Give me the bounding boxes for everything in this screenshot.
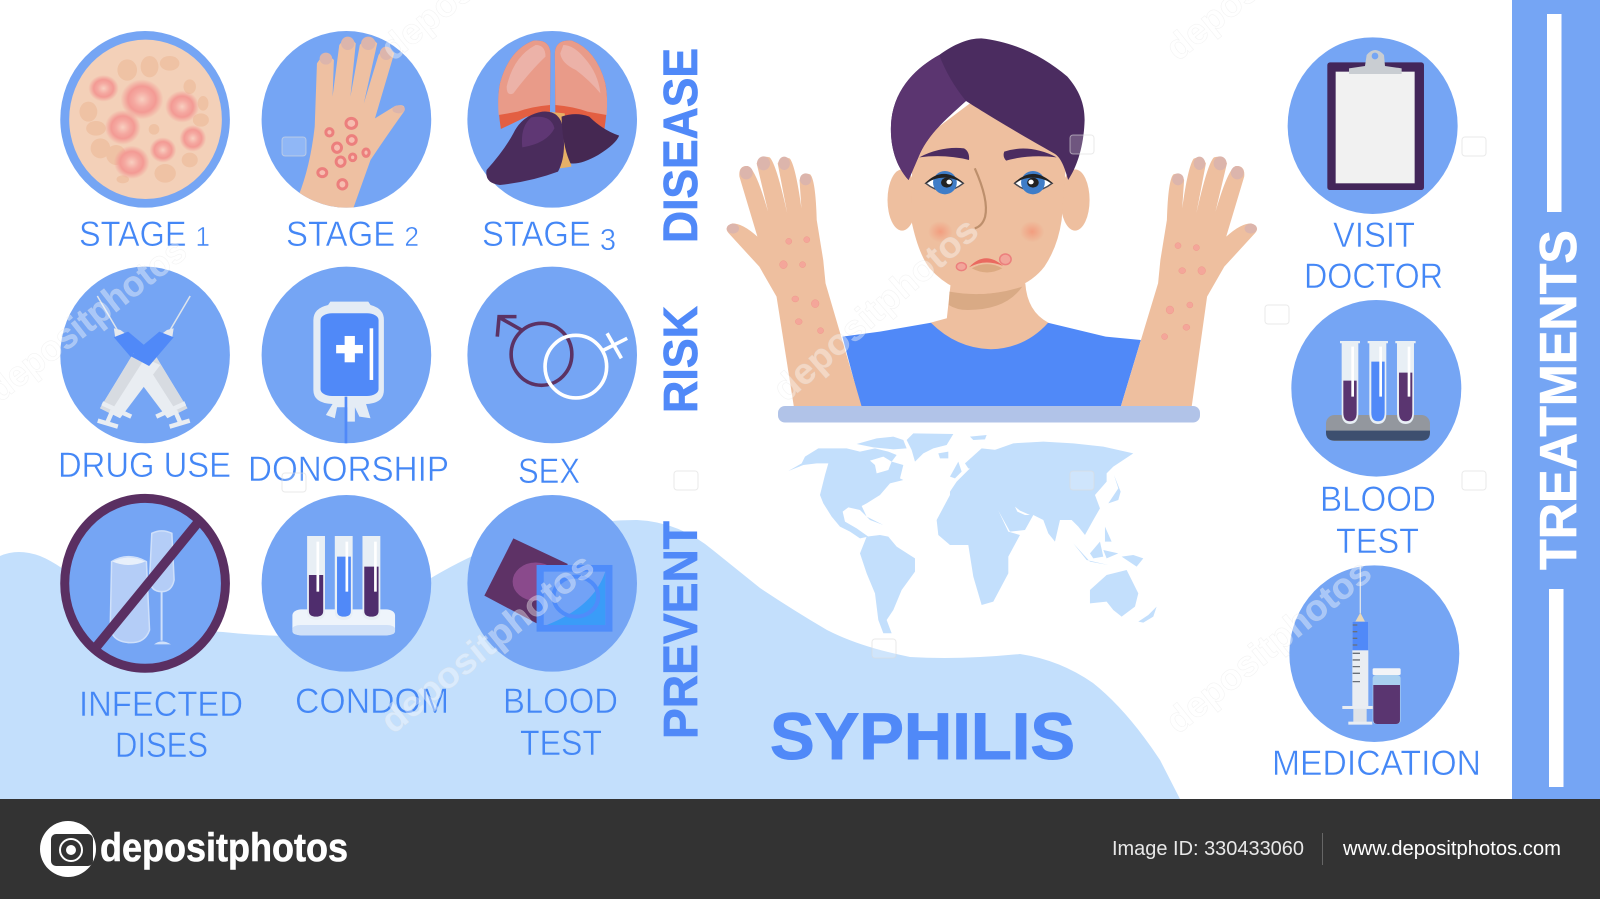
label: medication: MEDICATION bbox=[1272, 744, 1481, 783]
label: donorship: DONORSHIP bbox=[248, 450, 449, 489]
label: infected dises: INFECTED bbox=[79, 685, 243, 724]
mouth with sores bbox=[956, 254, 1011, 272]
label: visit doctor: DOCTOR bbox=[1304, 257, 1443, 296]
label: condom: CONDOM bbox=[295, 682, 449, 721]
icon: test tubes white rack bbox=[262, 495, 431, 672]
left ear bbox=[888, 169, 917, 231]
background wave bbox=[0, 520, 1180, 799]
label: blood test: TEST bbox=[1336, 522, 1419, 561]
illustration: patient with rash bbox=[727, 38, 1257, 406]
icon: syringe and vial bbox=[1289, 565, 1459, 742]
label: stage 2: STAGE 2 bbox=[286, 215, 419, 254]
eyebrows bbox=[919, 148, 1057, 161]
label: blood test bbox=[503, 682, 618, 763]
panel: treatments column bbox=[1272, 37, 1481, 783]
icon: blood donation bag bbox=[262, 267, 431, 443]
label: stage 3: 3 bbox=[600, 222, 616, 257]
icon: clipboard bbox=[1288, 37, 1458, 214]
icon: no shared glasses bbox=[65, 498, 225, 668]
label: drug use: DRUG USE bbox=[58, 446, 231, 485]
icon: condom packets bbox=[467, 495, 637, 672]
icon: crossed syringes bbox=[60, 267, 230, 443]
nose bbox=[975, 168, 986, 228]
right ear bbox=[1061, 169, 1090, 231]
panel: prevent row bbox=[65, 495, 708, 765]
label: sex: SEX bbox=[518, 452, 580, 491]
heading: disease: DISEASE bbox=[655, 48, 708, 243]
shirt bbox=[842, 323, 1141, 406]
world map bbox=[788, 433, 1157, 633]
label: infected dises: DISES bbox=[115, 726, 208, 765]
icon: stage 3 lungs and liver bbox=[467, 31, 637, 208]
label: stage 1: STAGE 1 bbox=[79, 215, 210, 254]
watermarks bbox=[0, 0, 1486, 741]
icon: blood test tubes bbox=[1291, 300, 1461, 477]
logo wordmark: depositphotos bbox=[100, 826, 348, 870]
eye right bbox=[1014, 171, 1054, 194]
right arm and hand bbox=[1121, 156, 1257, 406]
watermarks: depositphotos bbox=[764, 209, 986, 409]
icon: male and female symbols bbox=[467, 267, 637, 443]
heading: treatments: TREATMENTS bbox=[1530, 230, 1588, 570]
panel: treatments sidebar bbox=[1512, 0, 1600, 799]
logo: camera badge bbox=[40, 821, 96, 877]
label: visit doctor: VISIT bbox=[1333, 216, 1415, 255]
face bbox=[911, 93, 1067, 294]
neck bbox=[931, 283, 1048, 349]
panel: disease row bbox=[60, 31, 708, 257]
footer bar bbox=[0, 799, 1600, 899]
left arm and hand bbox=[727, 156, 861, 406]
hair bbox=[891, 38, 1085, 180]
icon: stage 1 skin rash bbox=[60, 31, 230, 208]
label: stage 3: STAGE bbox=[482, 215, 598, 254]
watermarks: depositphotos bbox=[1157, 551, 1379, 741]
icon: stage 2 hand with sores bbox=[262, 31, 431, 210]
image id: Image ID: 330433060 bbox=[1112, 838, 1304, 860]
watermarks: depositphotos bbox=[372, 544, 602, 741]
heading: risk: RISK bbox=[655, 306, 708, 413]
eye left bbox=[924, 171, 964, 194]
heading: prevent: PREVENT bbox=[655, 521, 708, 739]
label: visit doctor bbox=[1304, 216, 1443, 296]
label: blood test: BLOOD bbox=[503, 682, 618, 721]
label: blood test: BLOOD bbox=[1320, 480, 1436, 519]
panel: risk row bbox=[58, 267, 708, 491]
table edge bbox=[778, 406, 1200, 422]
website url: www.depositphotos.com bbox=[1342, 838, 1561, 860]
label: blood test: TEST bbox=[520, 724, 602, 763]
cheeks bbox=[928, 221, 1044, 242]
label: blood test bbox=[1320, 480, 1436, 561]
label: infected dises bbox=[79, 685, 243, 765]
title: SYPHILIS bbox=[770, 699, 1075, 773]
